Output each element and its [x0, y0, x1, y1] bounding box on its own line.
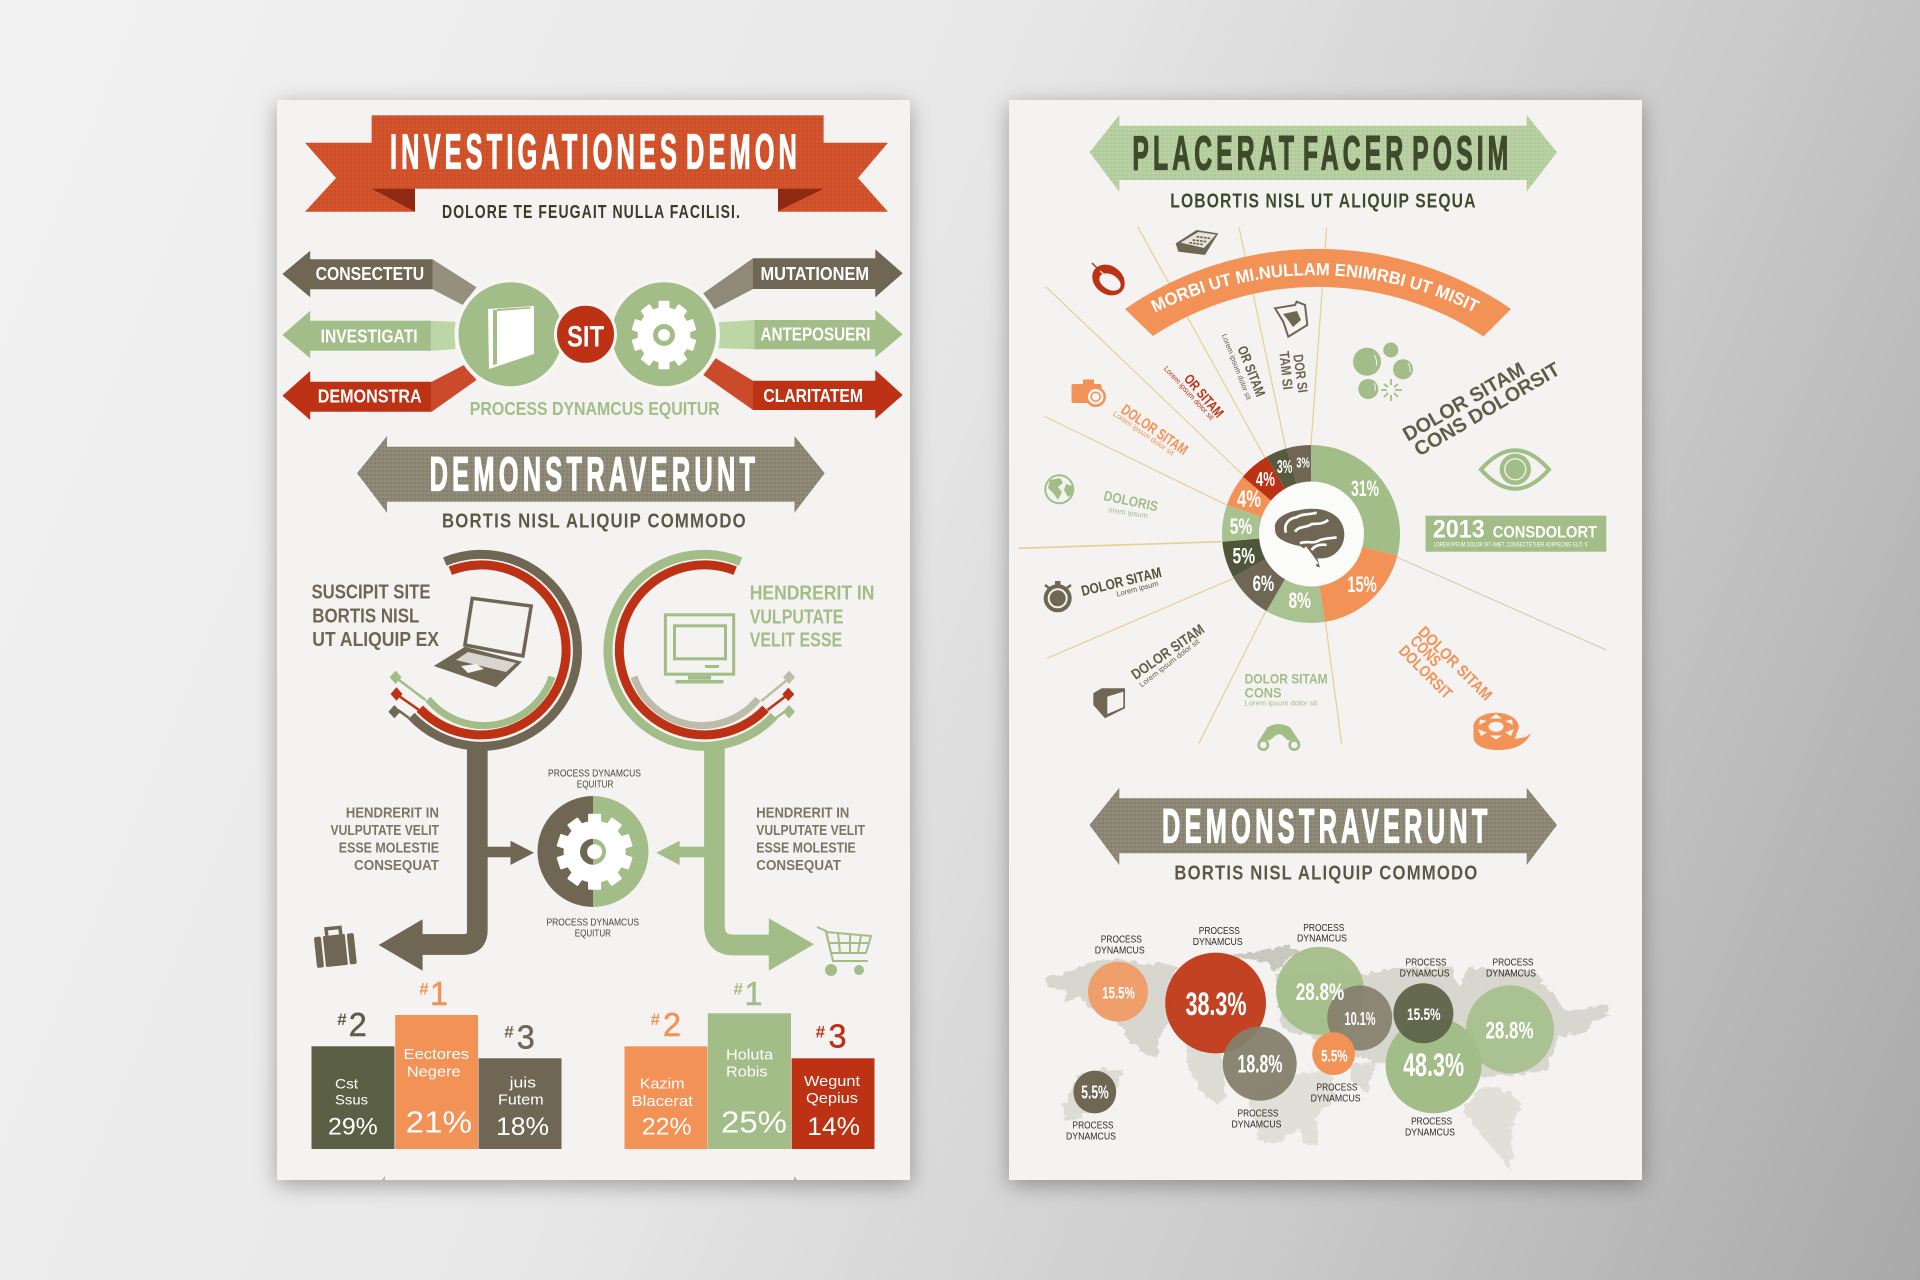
label: dolor sitam cons dolorsit orange: CONS [1406, 633, 1444, 671]
arrow: anteposueri [719, 310, 903, 357]
bar chart: left podium: Negere [407, 1064, 461, 1081]
bubble chart: 38.3% [1186, 986, 1246, 1022]
bubble chart: 28.8% [1296, 979, 1344, 1006]
arrow: claritatem: CLARITATEM [763, 386, 863, 406]
bubble chart: 15.5% [1102, 983, 1135, 1002]
text: suscipit: SUSCIPIT SITE [312, 581, 430, 603]
text: hendrerit green [750, 582, 874, 652]
banner: demonstraverunt 2 [1090, 788, 1557, 865]
text: right paragraph: HENDRERIT IN [756, 805, 849, 821]
bar chart: right podium: # [651, 1010, 661, 1029]
label: dolor sitam cons green [1245, 670, 1328, 708]
donut chart: 4% [1256, 469, 1275, 491]
icon: film reel [1473, 713, 1531, 750]
icon: book circle [456, 280, 564, 388]
label: dor si tam si [1276, 350, 1311, 394]
arrow: investigati [282, 311, 455, 358]
text: suscipit: UT ALIQUIP EX [312, 629, 440, 651]
icon: globe [1045, 475, 1073, 503]
icon: brain [1275, 509, 1344, 567]
arrow: demonstra [282, 365, 476, 420]
bubble captions: DYNAMCUS [1486, 969, 1536, 980]
label: or sitam gray: OR SITAM [1235, 344, 1269, 399]
label: or sitam gray: Lorem ipsum dolor sit [1220, 332, 1254, 402]
bar chart: left podium: 3 [517, 1018, 535, 1055]
caption: gear top: PROCESS DYNAMCUS [548, 768, 641, 780]
text: suscipit: BORTIS NISL [312, 605, 419, 627]
bubble chart: 10.1% [1344, 1009, 1376, 1029]
icon: tv [1093, 688, 1125, 718]
caption: gear bottom: PROCESS DYNAMCUS [546, 917, 639, 929]
label: dolor sitam cons dolorsit orange: DOLOR SITAM [1414, 624, 1495, 704]
bubble captions: PROCESS [1303, 923, 1345, 934]
icon: cart [817, 927, 871, 975]
text: left paragraph: ESSE MOLESTIE [339, 841, 439, 857]
icon: sit badge: SIT [567, 321, 604, 354]
text: hendrerit green: HENDRERIT IN [750, 582, 874, 604]
label: or sitam red: Lorem ipsum dolor sit [1162, 364, 1217, 423]
icon: bubbles [1353, 342, 1413, 401]
arrow: investigati: INVESTIGATI [321, 327, 418, 347]
donut chart: 4% [1237, 486, 1261, 513]
caption: gear bottom: EQUITUR [575, 928, 611, 940]
label: dolor sitam cons green: DOLOR SITAM [1245, 670, 1328, 686]
label: dolor sitam cons green: Lorem ipsum dolor sit [1245, 699, 1318, 708]
label: dolor sitam orange: DOLOR SITAM [1118, 401, 1191, 459]
subheading: BORTIS NISL ALIQUIP COMMODO [442, 511, 747, 533]
bubble captions [1066, 923, 1536, 1142]
caption: process: PROCESS DYNAMCUS EQUITUR [470, 399, 720, 419]
text: left paragraph: VULPUTATE VELIT [330, 823, 439, 839]
bar chart: left podium: # [337, 1010, 347, 1029]
panel: right poster [996, 92, 1654, 1197]
world map [1045, 945, 1608, 1170]
caption: gear bottom [546, 917, 639, 940]
icon: eye [1481, 450, 1549, 489]
callout: 2013: 2013 [1433, 516, 1485, 544]
panel: left poster [277, 100, 910, 1180]
bar chart: right podium: Blacerat [632, 1093, 694, 1110]
text: right paragraph: CONSEQUAT [756, 858, 841, 874]
banner: demonstraverunt: DEMONSTRAVERUNT [430, 449, 759, 502]
bubble captions: PROCESS [1072, 1120, 1114, 1131]
donut chart: 3% [1277, 457, 1292, 477]
text: suscipit [312, 581, 440, 651]
bubble chart: 15.5% [1407, 1005, 1441, 1024]
icon: timer [1045, 581, 1071, 610]
donut chart: 31% [1351, 476, 1379, 501]
arrow: mutationem: MUTATIONEM [760, 264, 869, 284]
bar chart: left podium: 21% [406, 1105, 472, 1140]
icon: mouse [1086, 258, 1131, 302]
bar chart: right podium: # [734, 979, 744, 998]
bar chart: left podium: Eectores [404, 1046, 469, 1063]
bubble captions: PROCESS [1492, 958, 1534, 969]
bubble captions: PROCESS [1101, 934, 1142, 945]
icon: laptop [434, 598, 531, 687]
bar chart: right podium: 1 [744, 975, 762, 1012]
arrow: consectetu [282, 251, 476, 305]
label: dolor sitam tv: Lorem ipsum dolor sit [1138, 636, 1202, 689]
label: dolor sitam orange: Lorem ipsum dolor sit [1111, 409, 1177, 458]
icon: gear circle [610, 280, 718, 388]
donut chart: 8% [1288, 588, 1311, 613]
subheading 2: BORTIS NISL ALIQUIP COMMODO [1174, 862, 1478, 884]
bubble chart [1073, 947, 1554, 1113]
bar chart: right podium: Holuta [726, 1046, 774, 1063]
banner: placerat: PLACERAT FACER POSIM [1132, 128, 1512, 181]
text: right paragraph: ESSE MOLESTIE [756, 841, 856, 857]
icon: notepad [1176, 230, 1218, 255]
bar chart: left podium: 2 [349, 1006, 367, 1043]
bar chart: left podium: # [504, 1022, 514, 1041]
icon: camera [1072, 380, 1105, 406]
bar chart: right podium: 3 [828, 1018, 846, 1055]
bar chart: left podium: 1 [430, 975, 448, 1012]
text: right paragraph [756, 805, 865, 874]
bar chart: left podium: 29% [328, 1113, 378, 1140]
label: or sitam red: OR SITAM [1181, 371, 1227, 421]
callout: 2013: CONSDOLORT [1493, 523, 1598, 542]
text: left paragraph [330, 805, 439, 874]
bubble chart: 5.5% [1081, 1082, 1109, 1102]
arrow: anteposueri: ANTEPOSUERI [760, 325, 870, 345]
curved banner [1125, 248, 1511, 336]
subtitle: DOLORE TE FEUGAIT NULLA FACILISI. [442, 202, 741, 222]
bubble captions: DYNAMCUS [1066, 1131, 1116, 1142]
caption: gear top: EQUITUR [577, 778, 614, 790]
bubble captions: PROCESS [1406, 958, 1447, 969]
bar chart: right podium: 25% [721, 1105, 787, 1140]
text: dolor sitam cons dolorsit: DOLOR SITAM [1399, 358, 1529, 446]
arrow: left stem [379, 748, 534, 971]
title ribbon: INVESTIGATIONES DEMON [390, 126, 801, 180]
bar chart: right podium: Kazim [640, 1075, 685, 1092]
banner: demonstraverunt 2: DEMONSTRAVERUNT [1162, 800, 1492, 853]
bar chart: right podium: 14% [807, 1113, 860, 1141]
title ribbon [305, 115, 888, 212]
caption: gear top [548, 768, 641, 790]
radial lines [1018, 227, 1606, 744]
chart: left rings [388, 554, 577, 746]
bubble captions: DYNAMCUS [1095, 945, 1145, 956]
label: dolor sitam cons dolorsit orange [1395, 624, 1495, 704]
arrow: right stem [656, 748, 814, 971]
text: right paragraph: VULPUTATE VELIT [756, 823, 865, 839]
arrow: consectetu: CONSECTETU [316, 264, 424, 284]
donut chart: 5% [1233, 544, 1255, 568]
curved banner: MORBI UT MI.NULLAM ENIMRBI UT MISIT [1150, 263, 1480, 312]
bubble captions: DYNAMCUS [1297, 934, 1347, 945]
bubble captions: DYNAMCUS [1400, 969, 1450, 980]
label: dor si tam si: DOR SI [1290, 353, 1311, 394]
text: dolor sitam cons dolorsit: CONS DOLORSIT [1411, 359, 1564, 461]
icon: suitcase [313, 926, 357, 968]
bubble captions: DYNAMCUS [1311, 1094, 1361, 1105]
label: dolor sitam cons dolorsit orange: DOLORSIT [1395, 643, 1455, 703]
bubble captions: DYNAMCUS [1405, 1128, 1455, 1139]
subheading: LOBORTIS NISL UT ALIQUIP SEQUA [1170, 190, 1476, 212]
label: dolor sitam cons green: CONS [1245, 684, 1282, 700]
bubble chart: 48.3% [1403, 1047, 1464, 1083]
bar chart: right podium: Qepius [806, 1090, 858, 1107]
bar chart: right podium: Wegunt [804, 1073, 861, 1090]
bubble chart: 18.8% [1238, 1051, 1282, 1079]
donut chart: 6% [1253, 571, 1274, 596]
label: or sitam gray [1220, 332, 1269, 402]
bar chart: right podium: Robis [726, 1064, 768, 1081]
bubble captions: PROCESS [1411, 1116, 1452, 1127]
arrow: claritatem [703, 358, 903, 419]
arrow: mutationem [703, 249, 903, 309]
bubble chart: 5.5% [1321, 1047, 1348, 1066]
bar chart: left podium: Cst [335, 1075, 358, 1091]
text: hendrerit green: VELIT ESSE [750, 630, 842, 652]
label: doloris: orem ipsum [1108, 505, 1149, 520]
label: dolor sitam timer: Lorem ipsum [1115, 579, 1159, 599]
donut chart: 15% [1347, 572, 1377, 597]
icon: monitor [665, 615, 734, 684]
icon: central gear [538, 796, 648, 907]
bubble captions: PROCESS [1238, 1109, 1279, 1120]
bubble captions: PROCESS [1199, 926, 1240, 937]
arrow: demonstra: DEMONSTRA [318, 387, 422, 407]
bar chart: left podium: 18% [496, 1113, 549, 1141]
bar chart: left podium: Futem [498, 1092, 544, 1109]
bubble captions: PROCESS [1316, 1083, 1358, 1094]
bar chart: right podium: 22% [642, 1113, 692, 1140]
label: doloris: DOLORIS [1102, 487, 1160, 514]
text: hendrerit green: VULPUTATE [750, 606, 843, 628]
bar chart: right podium [624, 975, 874, 1149]
bubble captions: DYNAMCUS [1193, 937, 1243, 948]
label: dolor sitam tv: DOLOR SITAM [1129, 622, 1208, 683]
bar chart: right podium: 2 [663, 1006, 681, 1043]
bar chart: left podium [312, 975, 562, 1149]
icon: map card [1275, 302, 1307, 337]
donut chart [1222, 445, 1400, 623]
donut chart: 5% [1230, 514, 1252, 539]
bar chart: right podium: # [816, 1022, 826, 1041]
label: dolor sitam orange [1111, 401, 1191, 459]
chart: right rings [608, 554, 795, 746]
label: dor si tam si: TAM SI [1276, 350, 1296, 390]
label: dolor sitam timer: DOLOR SITAM [1080, 565, 1163, 600]
bubble captions: DYNAMCUS [1232, 1120, 1282, 1131]
icon: binoculars [1257, 724, 1301, 750]
banner: placerat [1090, 115, 1557, 192]
callout: 2013 [1426, 516, 1606, 552]
text: left paragraph: HENDRERIT IN [346, 805, 439, 821]
callout: 2013: LOREM IPSUM DOLOR SIT AMET, CONSECTETUER ADIPISCING ELIT, S [1434, 542, 1588, 548]
banner: demonstraverunt [357, 436, 825, 513]
text: left paragraph: CONSEQUAT [354, 858, 439, 874]
icon: sit badge [556, 304, 616, 364]
bar chart: left podium: juis [508, 1075, 536, 1092]
bubble chart: 28.8% [1486, 1017, 1534, 1044]
bar chart: left podium: Ssus [335, 1091, 368, 1107]
bar chart: left podium: # [419, 979, 429, 998]
donut chart: 3% [1296, 454, 1310, 472]
